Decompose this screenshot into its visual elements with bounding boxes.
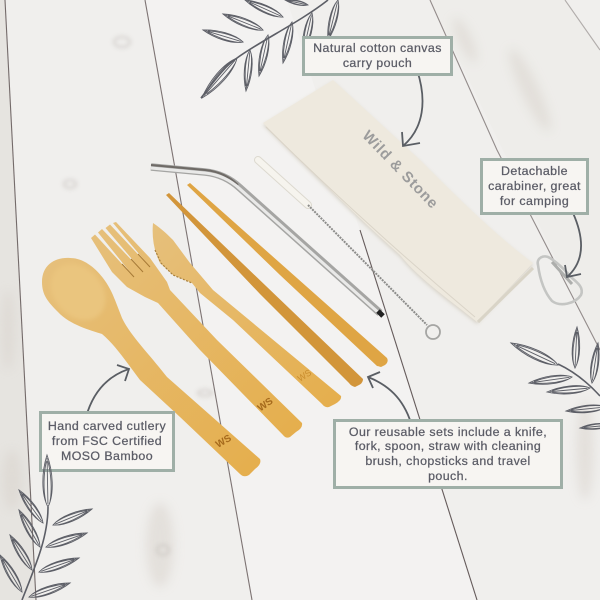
knife logo: WS (296, 367, 313, 384)
callout: bamboo cutlery: MOSO Bamboo (61, 449, 153, 463)
leaf spray: right (509, 327, 600, 431)
callout: set contents: Our reusable sets include a knife, (349, 425, 547, 439)
callout: set contents: brush, chopsticks and travel (365, 454, 531, 468)
callout: carabiner (480, 158, 589, 215)
arrow: to carabiner (565, 213, 581, 277)
callout: set contents (333, 419, 563, 489)
knife (153, 223, 341, 407)
fork (91, 222, 302, 438)
carabiner (538, 256, 582, 304)
callout: carry pouch: Natural cotton canvas (313, 41, 442, 55)
callout: bamboo cutlery (39, 411, 175, 472)
fork logo: WS (256, 396, 276, 414)
callout: carabiner: for camping (500, 194, 569, 208)
callout: carry pouch: carry pouch (343, 56, 412, 70)
leaf spray: top (198, 0, 342, 101)
canvas pouch (263, 80, 533, 324)
pouch logo text: Wild & Stone (359, 127, 442, 212)
callout: carry pouch (302, 36, 453, 76)
steel straw (151, 165, 383, 316)
arrow: to pouch (402, 70, 423, 146)
spoon (39, 253, 260, 476)
arrow: to set (368, 372, 411, 423)
chopsticks (166, 183, 388, 387)
callout: carabiner: carabiner, great (488, 179, 581, 193)
callout: carabiner: Detachable (501, 164, 568, 178)
callout: set contents: pouch. (428, 469, 468, 483)
cleaning brush (258, 160, 440, 339)
wood knots (64, 37, 212, 555)
callout: bamboo cutlery: from FSC Certified (52, 434, 162, 448)
arrow: to cutlery (86, 365, 129, 417)
callout: bamboo cutlery: Hand carved cutlery (48, 419, 166, 433)
spoon logo: WS (214, 433, 234, 451)
callout: set contents: fork, spoon, straw with cleaning (355, 439, 541, 453)
